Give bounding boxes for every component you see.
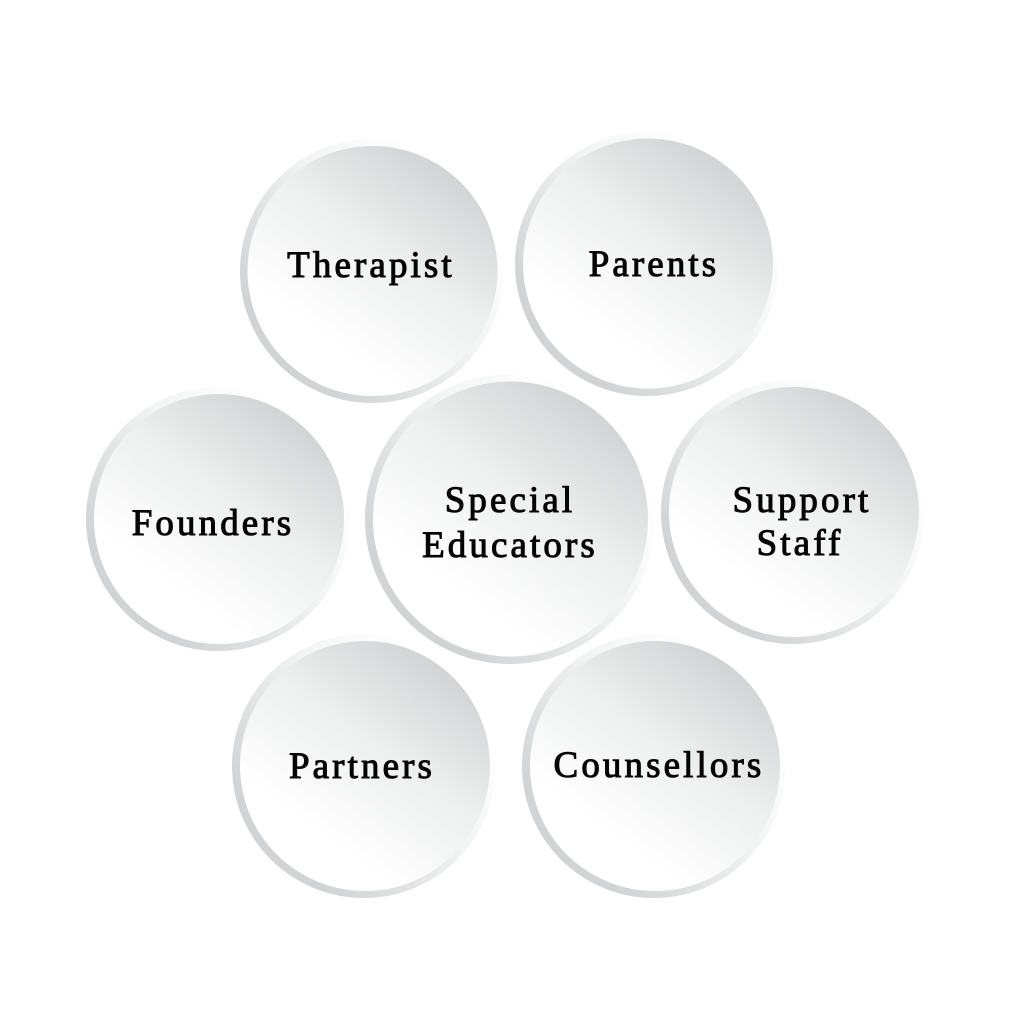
node: Parents	[515, 132, 779, 396]
node: Support Staff	[661, 380, 925, 644]
node: Partners	[232, 634, 496, 898]
node: Support Staff: Support	[733, 480, 871, 521]
node: Parents: Parents	[589, 244, 719, 285]
node: Special Educators: Special	[445, 480, 575, 521]
node: Counsellors	[522, 634, 786, 898]
node: Therapist	[240, 139, 504, 403]
node: Support Staff: Staff	[757, 523, 843, 564]
node: Founders: Founders	[132, 503, 294, 544]
node: Founders	[86, 387, 350, 651]
node: Special Educators	[365, 374, 655, 664]
node: Counsellors: Counsellors	[554, 745, 764, 786]
node: Partners: Partners	[289, 746, 435, 787]
node: Therapist: Therapist	[287, 245, 455, 286]
node: Special Educators: Educators	[422, 525, 598, 566]
